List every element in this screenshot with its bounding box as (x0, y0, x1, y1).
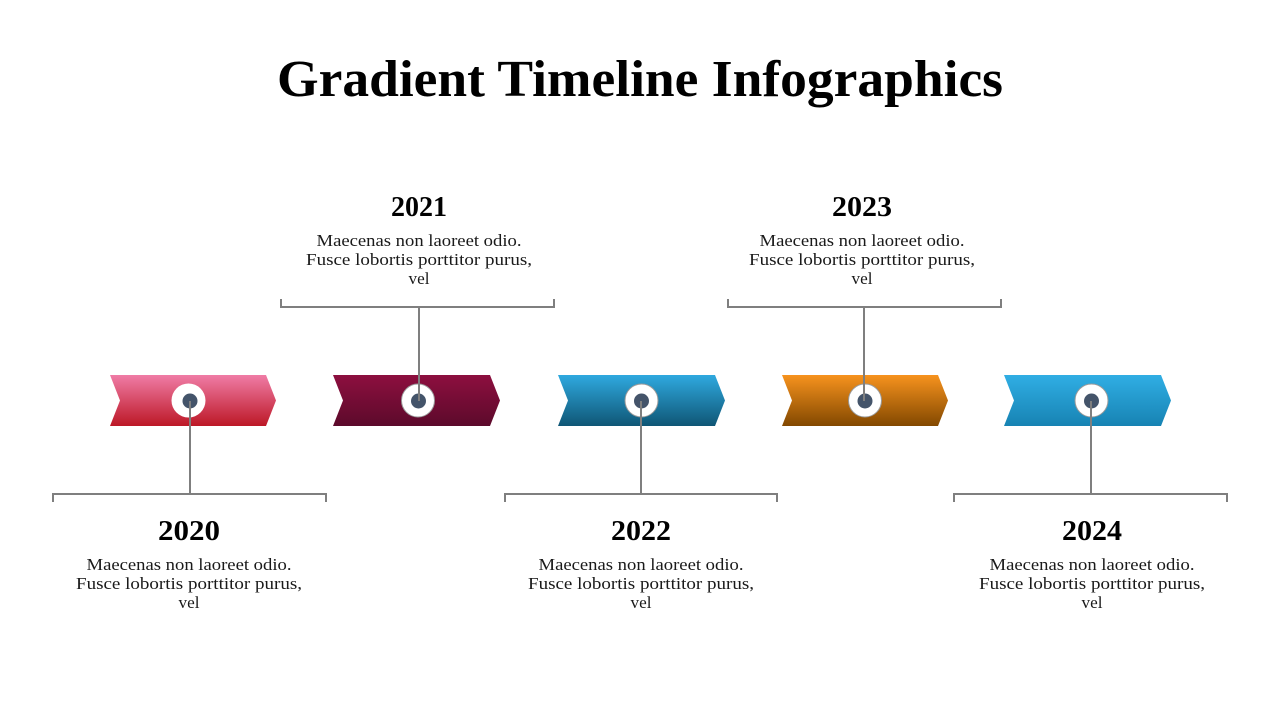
chevron: 2022 (558, 375, 725, 426)
chevron: 2021 (333, 375, 500, 426)
marker: 2024 (1075, 384, 1108, 417)
year: 2023: 2023 (832, 192, 892, 223)
connector: 2021 (281, 299, 554, 401)
year: 2021: 2021 (391, 192, 447, 223)
marker: 2021 (402, 384, 434, 417)
connector: 2020 (53, 401, 326, 502)
description: 2023 (749, 231, 975, 288)
description: 2020: Maecenas non laoreet odio. (86, 555, 292, 574)
description: 2024: Maecenas non laoreet odio. (990, 555, 1194, 574)
description: 2024: Fusce lobortis porttitor purus, (979, 574, 1205, 593)
year: 2020: 2020 (158, 516, 220, 547)
marker: 2020 (172, 384, 206, 418)
description: 2020: Fusce lobortis porttitor purus, (76, 574, 302, 593)
milestone: 2022 (505, 375, 777, 612)
marker: 2023 (848, 384, 882, 417)
milestone: 2024 (954, 375, 1227, 612)
description: 2022: vel (630, 593, 652, 612)
connector: 2022 (505, 401, 777, 502)
chevron: 2020 (110, 375, 276, 426)
description: 2024: vel (1082, 593, 1103, 612)
title: Gradient Timeline Infographics (277, 51, 1003, 108)
description: 2023: vel (852, 269, 873, 288)
milestone: 2020 (53, 375, 326, 612)
milestone: 2023 (728, 192, 1001, 426)
description: 2022: Fusce lobortis porttitor purus, (528, 574, 754, 593)
chevron: 2024 (1004, 375, 1171, 426)
description: 2024 (979, 555, 1205, 612)
connector: 2024 (954, 401, 1227, 502)
chevron: 2023 (782, 375, 948, 426)
description: 2023: Maecenas non laoreet odio. (760, 231, 964, 250)
description: 2023: Fusce lobortis porttitor purus, (749, 250, 975, 269)
description: 2021: vel (408, 269, 430, 288)
description: 2020 (76, 555, 302, 612)
description: 2021: Fusce lobortis porttitor purus, (306, 250, 532, 269)
description: 2022: Maecenas non laoreet odio. (538, 555, 744, 574)
description: 2021 (306, 231, 532, 288)
milestone: 2021 (281, 192, 554, 426)
connector: 2023 (728, 299, 1001, 401)
description: 2020: vel (178, 593, 200, 612)
year: 2022: 2022 (611, 516, 671, 547)
description: 2021: Maecenas non laoreet odio. (316, 231, 522, 250)
marker: 2022 (625, 384, 658, 417)
description: 2022 (528, 555, 754, 612)
year: 2024: 2024 (1062, 516, 1122, 547)
